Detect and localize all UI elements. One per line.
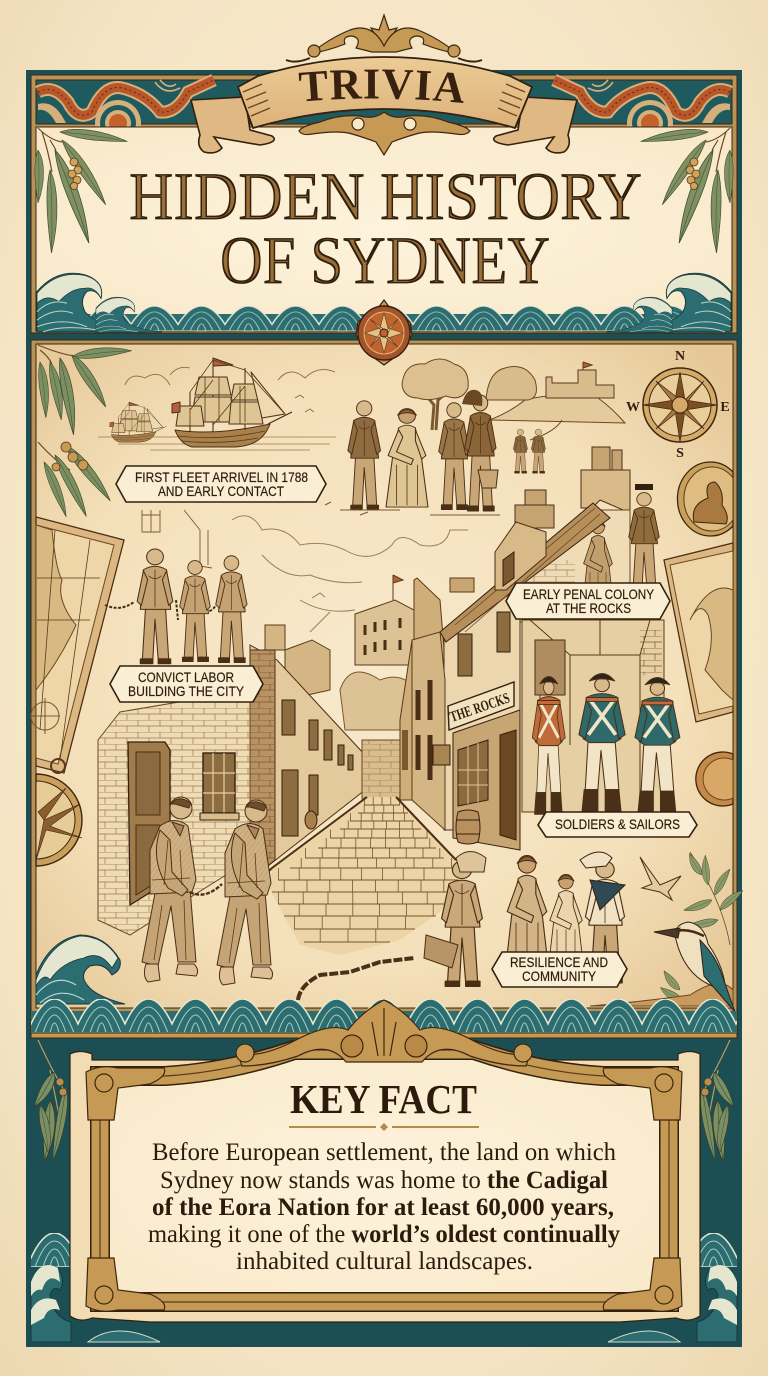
title panel background [36,127,732,331]
footer side: foliage left [31,1040,71,1163]
banner left tail [191,97,274,153]
panel: key fact [70,1000,700,1322]
map: left [30,517,124,773]
lower wall [444,582,520,830]
contact group [325,390,500,515]
title text [129,158,642,298]
map: right [664,543,733,722]
roof [440,503,610,642]
label: resilience and community [492,952,627,987]
convicts: foreground [142,797,273,985]
compass rose: N [675,349,685,364]
title text: HIDDEN HISTORY [129,158,642,234]
label: resilience and community: RESILIENCE AND [510,954,608,970]
banner main ribbon [238,57,532,128]
label: early penal colony [506,583,670,619]
large wave: left [36,935,125,1004]
panel: illustrated scene [30,340,745,1038]
wall sketch top [142,510,212,568]
banner text: TRIVIA [298,70,464,103]
olive branch [658,852,745,1004]
cobblestone street [268,797,462,955]
label: first fleet [116,466,326,502]
label: soldiers and sailors [538,812,697,837]
back room behind soldiers [522,620,664,812]
large building: The Rocks [412,447,659,850]
shop front [453,710,520,850]
gold divider [31,1033,737,1038]
ornament below banner [299,112,470,155]
distant town [265,575,474,730]
left brick wall with door [98,690,250,935]
label: convict labor [110,666,263,702]
label: convict labor: CONVICT LABOR [138,669,234,685]
ships: first fleet [98,358,336,450]
coin: upper [677,462,733,536]
distant figures [513,429,546,473]
parchment scroll [70,1052,700,1322]
panel: title [31,75,737,333]
scene frame [31,340,737,1037]
medallion [356,300,412,365]
label: first fleet: FIRST FLEET ARRIVEL IN 1788 [135,469,308,485]
shop sign: THE ROCKS [448,690,512,726]
upper wall [520,510,630,622]
clouds [232,516,468,632]
ornament above banner [286,15,482,62]
label: early penal colony: EARLY PENAL COLONY [523,586,655,602]
compass rose: W [626,400,640,415]
dormer [495,522,546,590]
footer side: waves right [608,1233,737,1342]
barrels [456,810,480,844]
crest ornament [236,1000,532,1066]
chimneys [581,470,630,513]
loose chain [298,958,414,1000]
compass rose [626,349,730,461]
ornate gold frame [86,1050,682,1311]
label: convict labor: BUILDING THE CITY [128,683,245,699]
upper windows [458,612,510,676]
label: resilience and community: COMMUNITY [522,968,597,984]
receding left houses [250,640,412,880]
tree [402,359,468,430]
heading divider [289,1123,479,1131]
label: soldiers and sailors: SOLDIERS & SAILORS [555,816,680,832]
street facing buildings [412,632,445,830]
hanging sign [433,745,450,765]
figures by chimney [582,520,614,611]
footer side: foliage right [697,1040,737,1163]
key fact text: inhabited cultural landscapes. [236,1248,533,1275]
footer side: waves left [31,1233,160,1342]
banner: Trivia [190,56,578,154]
title text: OF SYDNEY [220,222,550,298]
soldiers [532,674,680,814]
foliage: right [640,126,733,253]
scene parchment [36,344,733,1008]
top pattern band [31,75,737,333]
key fact text: Before European settlement, the land on which [152,1139,616,1166]
key fact text: making it one of the world’s oldest continually [148,1221,620,1248]
key fact text: of the Eora Nation for at least 60,000 years, [152,1194,614,1221]
community group [424,852,625,987]
key fact text: Sydney now stands was home to the Cadigal [160,1167,608,1194]
convicts: upper group [105,549,247,664]
coin: lower [696,752,733,806]
wave band [37,273,731,332]
bird in flight [640,857,681,900]
eucalyptus top left [37,345,132,518]
banner right tail [494,97,577,153]
foliage: left [35,126,128,253]
compass rose: E [720,400,730,415]
compass: left [36,759,82,866]
label: first fleet: AND EARLY CONTACT [158,483,284,499]
castle on hill [486,362,625,440]
kookaburra [590,922,735,1012]
label: early penal colony: AT THE ROCKS [546,600,631,616]
heading: KEY FACT [290,1076,477,1122]
compass rose: S [676,446,684,461]
key fact text [148,1139,620,1275]
shop sign [448,682,514,730]
wave band: lower [31,999,737,1033]
